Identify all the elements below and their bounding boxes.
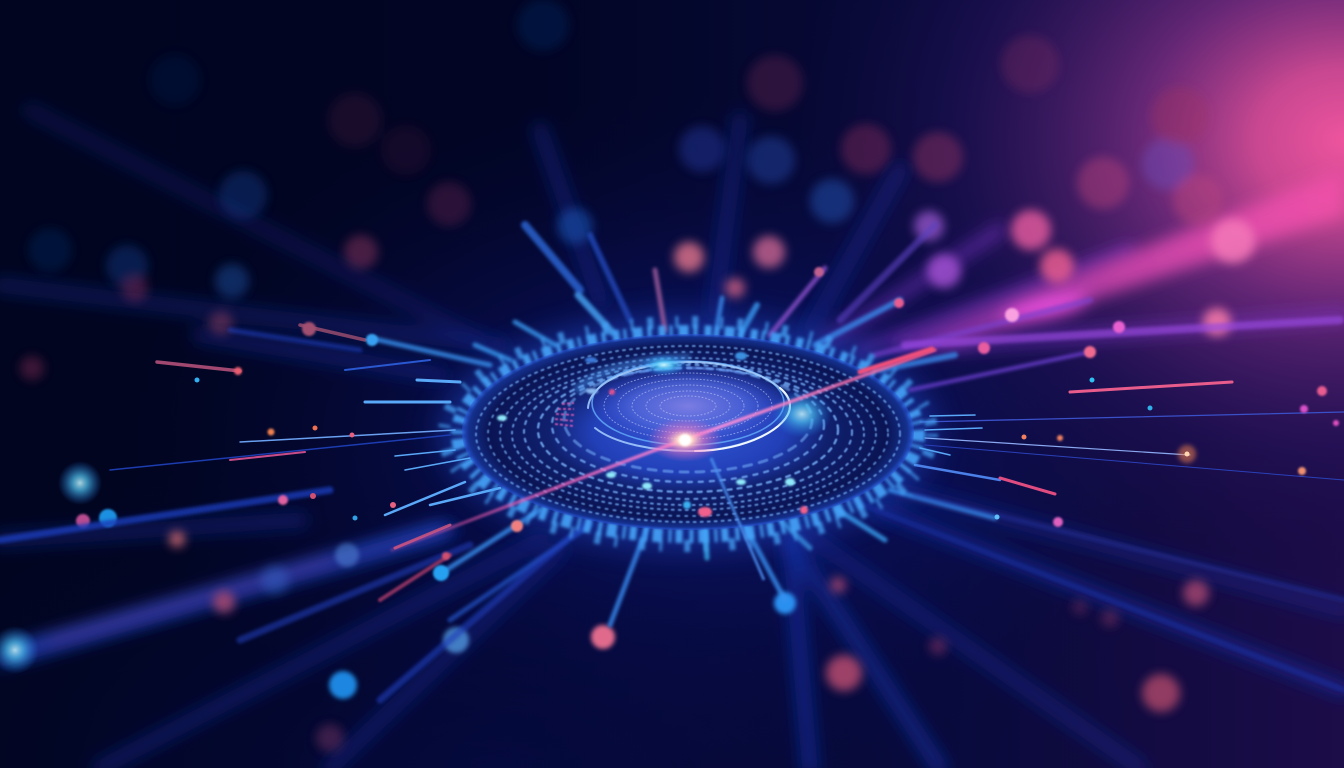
bokeh circles bbox=[20, 0, 1223, 380]
pink slash through the centre bbox=[392, 349, 935, 550]
inner core bbox=[590, 366, 786, 446]
blue bokeh highlights lower left bbox=[0, 461, 796, 699]
pink data arc bbox=[555, 403, 574, 426]
central data disc bbox=[462, 334, 914, 580]
glowing nodes on the disc bbox=[497, 352, 832, 517]
central flare bbox=[647, 418, 723, 462]
dotted data rings bbox=[476, 346, 900, 522]
lower left light streak bbox=[20, 530, 440, 650]
tick marks around the disc rim bbox=[444, 322, 932, 546]
disc base bbox=[462, 334, 914, 530]
brighter pink bokeh bbox=[169, 210, 1255, 752]
halo around the disc bbox=[438, 314, 938, 550]
glow rings bbox=[576, 358, 790, 451]
pink diagonal light beam bbox=[890, 170, 1344, 345]
small bright nodes at ray ends bbox=[194, 267, 1339, 581]
thin rays radiating from the disc bbox=[0, 225, 1344, 700]
vertical light ray on disc bbox=[711, 458, 764, 580]
